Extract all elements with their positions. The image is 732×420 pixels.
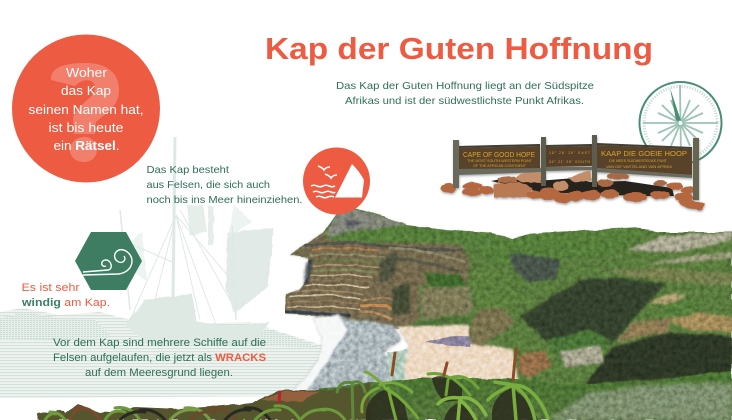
intro text: Afrikas und ist der südwestlichste Punkt Afrikas.	[345, 95, 584, 107]
wrecks text: auf dem Meeresgrund liegen.	[85, 367, 233, 379]
circle text: ein Rätsel.	[54, 138, 120, 153]
wrecks text: Vor dem Kap sind mehrere Schiffe auf die	[53, 337, 266, 349]
coast and sea engraving	[0, 308, 322, 398]
sail	[335, 164, 364, 198]
wind text: Es ist sehr	[22, 282, 80, 294]
headland top rock	[326, 207, 407, 238]
wrecks text: Felsen aufgelaufen, die jetzt als WRACKS	[53, 352, 266, 364]
circle text: seinen Namen hat,	[28, 102, 144, 117]
sign text: VAN DIE VASTELAND VAN AFRIKA	[606, 165, 673, 169]
sign posts	[453, 135, 699, 200]
small aloe left	[337, 382, 365, 420]
sign rails	[458, 167, 692, 178]
aloe plant 1	[362, 372, 418, 420]
cliff shadows	[302, 220, 560, 314]
sea	[300, 315, 410, 393]
aloe plant 3	[438, 398, 486, 420]
grass slope	[330, 226, 650, 263]
pale gully	[560, 345, 605, 368]
intro text	[336, 80, 594, 107]
right side rock band	[616, 318, 672, 342]
sign text	[463, 149, 687, 169]
foreground grass	[300, 371, 732, 420]
sign text: OF THE AFRICAN CONTINENT	[473, 164, 527, 168]
sign text: CAPE OF GOOD HOPE	[463, 150, 535, 159]
cliff strata	[287, 243, 465, 318]
dark lower right ground	[585, 333, 732, 384]
circle text: das Kap	[61, 83, 111, 98]
panel: question circle	[12, 34, 160, 182]
sign: Cape of Good Hope	[441, 135, 705, 210]
beach shadow	[426, 336, 472, 347]
green patches	[420, 267, 520, 328]
sign text: KAAP DIE GOEIE HOOP	[601, 149, 687, 158]
ship sails	[120, 205, 274, 314]
sign text: 34° 21' 25" SOUTH	[549, 160, 590, 164]
aloe row bottom left	[37, 383, 370, 420]
cliff face	[285, 233, 470, 330]
rock text: aus Felsen, die sich auch	[146, 179, 270, 191]
dark valley shadow	[520, 278, 667, 355]
landscape photo: Cape of Good Hope	[285, 207, 732, 420]
icon: sailing boat circle	[303, 148, 370, 214]
bare pale slope	[600, 232, 732, 332]
rock text	[146, 164, 302, 206]
circle text: Woher	[66, 65, 108, 80]
ship hull	[125, 294, 270, 345]
sign text: THE MOST SOUTH-WESTERN POINT	[467, 159, 533, 163]
aloe flower stalks	[392, 349, 516, 380]
wind text	[21, 282, 110, 309]
aloe plant 4	[488, 382, 548, 420]
aloes foreground	[37, 349, 548, 420]
title: Kap der Guten Hoffnung	[265, 31, 653, 66]
illustration: engraved ship and coast	[0, 137, 322, 398]
beach	[397, 325, 520, 392]
circle text: ist bis heute	[48, 120, 124, 135]
mid slope ochre	[420, 286, 473, 320]
intro text: Das Kap der Guten Hoffnung liegt an der Südspitze	[336, 80, 594, 92]
wind text: windig am Kap.	[21, 297, 110, 309]
ship masts and rigging	[120, 137, 240, 330]
aloe plant 2	[428, 374, 478, 402]
rock text: noch bis ins Meer hineinziehen.	[146, 194, 302, 206]
sign text: DIE MEES SUIDWESTELIKE PUNT	[609, 159, 668, 163]
rock text: Das Kap besteht	[146, 164, 229, 176]
sign rocks	[441, 170, 705, 210]
birds and waves	[311, 166, 337, 198]
brown rocks right of beach	[518, 350, 552, 378]
land base	[285, 207, 732, 385]
sign boards	[458, 144, 692, 175]
icon: question mark	[51, 63, 119, 162]
lagoon	[387, 348, 408, 385]
sign text: 18° 28' 26" EAST	[549, 151, 591, 155]
green valley floor	[547, 330, 613, 360]
surf foam	[292, 314, 348, 393]
icon: wind hexagon	[75, 232, 142, 290]
sea stack rock	[470, 308, 514, 346]
circle text	[28, 65, 144, 153]
compass rose	[640, 82, 722, 164]
wrecks text	[53, 337, 266, 379]
foreground shrubs	[548, 382, 732, 420]
